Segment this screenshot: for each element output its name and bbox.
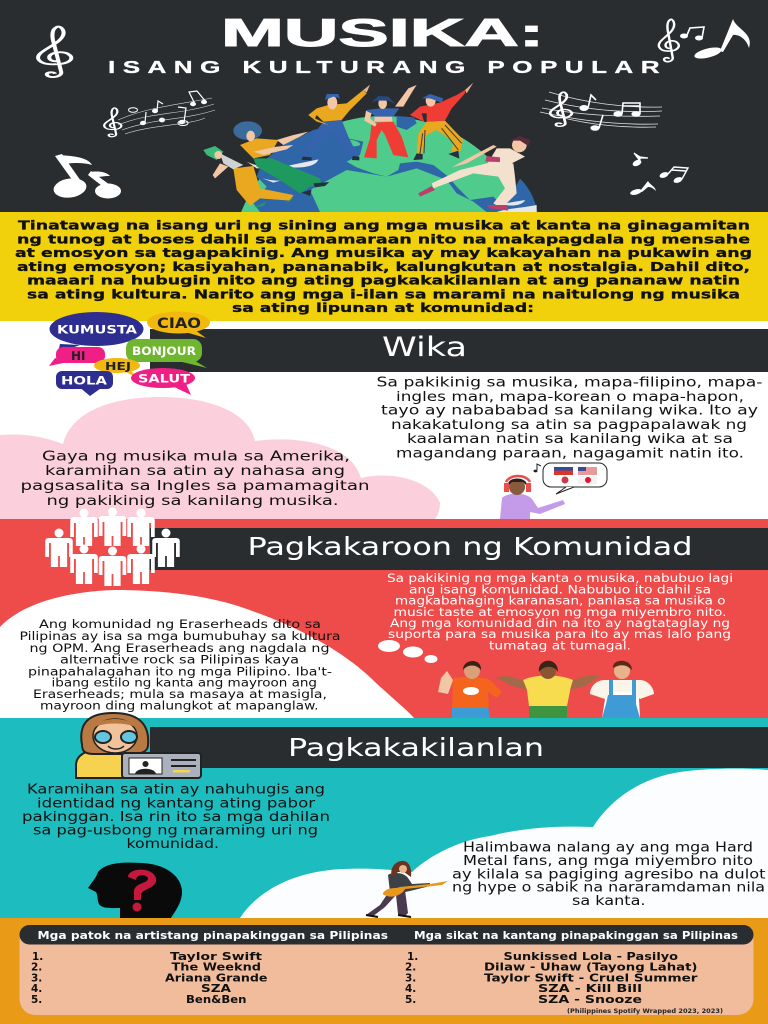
Komunidad paragraph: Sa pakikinig ng mga kanta o musika, nabubuo lagi	[387, 572, 733, 585]
list: top songs: Sunkissed Lola - Pasilyo	[504, 951, 678, 963]
Wika paragraph: tayo ay nabababad sa kanilang wika. Ito ay	[381, 404, 758, 418]
list: top songs: 5.	[405, 994, 416, 1006]
pink cloud text: pagsasalita sa Ingles sa pamamagitan	[20, 479, 370, 494]
panel: Pagkakakilanlan section background	[0, 718, 768, 918]
Pagkakakilanlan paragraph: identidad ng kantang ating pabor	[37, 796, 316, 812]
Eraserheads paragraph: Eraserheads; mula sa masaya at masigla,	[33, 688, 327, 701]
intro text: sa ating kultura. Narito ang mga i-ilan sa marami na naitulong ng musika	[27, 286, 740, 302]
icon: big beamed notes	[52, 154, 121, 200]
list: top songs: Dilaw - Uhaw (Tayong Lahat)	[484, 962, 698, 974]
dancer: blue trousers	[302, 85, 370, 160]
Eraserheads paragraph: Ang komunidad ng Eraserheads dito sa	[39, 618, 321, 631]
icon: group of people	[45, 508, 180, 586]
icon: small notes right	[630, 153, 688, 196]
cloud paragraph	[452, 840, 766, 909]
Wika paragraph: magandang paraan, nagagamit natin ito.	[396, 446, 744, 462]
Eraserheads paragraph: ng OPM. Ang Eraserheads ang nagdala ng	[30, 642, 330, 655]
friend: yellow shirt	[495, 661, 600, 718]
list: top songs: 2.	[405, 962, 416, 974]
list: top songs: 4.	[405, 983, 416, 995]
Eraserheads paragraph: ibang estilo ng kanta ang mayroon ang	[52, 676, 317, 690]
icon: person with ID card	[76, 713, 201, 778]
icon: greeting speech bubbles	[49, 312, 210, 396]
Komunidad paragraph: music taste at emosyon ng mga miyembro nito.	[394, 606, 726, 619]
Pagkakakilanlan paragraph: Karamihan sa atin ay nahuhugis ang	[27, 782, 325, 798]
Eraserheads paragraph: mayroon ding malungkot at mapanglaw.	[40, 700, 318, 712]
list: top artists: 3.	[31, 972, 42, 984]
source citation: (Philippines Spotify Wrapped 2023, 2023)	[567, 1008, 723, 1015]
list: top artists: Ariana Grande	[165, 972, 268, 984]
white thought cloud	[0, 590, 414, 718]
table header: songs: Mga sikat na kantang pinapakinggan sa Pilipinas	[414, 930, 738, 942]
table header: artists: Mga patok na artistang pinapakinggan sa Pilipinas	[38, 930, 388, 942]
list: top artists: 4.	[31, 983, 42, 995]
Wika paragraph: nakakatulong sa atin sa pagpapalawak ng	[391, 418, 747, 433]
Eraserheads paragraph	[20, 618, 340, 712]
list: top artists: The Weeknd	[172, 962, 261, 974]
icon: head with question mark	[88, 863, 182, 918]
cloud paragraph: ng hype o sabik na nararamdaman nila	[452, 880, 765, 896]
heading: Wika: Wika	[382, 332, 467, 363]
icon: treble clef left	[38, 27, 71, 77]
pink cloud	[0, 397, 440, 519]
Wika paragraph: ingles man, mapa-korean o mapa-hapon,	[396, 390, 744, 405]
Eraserheads paragraph: Pilipinas ay isa sa mga bumubuhay sa kultura	[20, 630, 340, 643]
list: top songs: 1.	[407, 951, 418, 963]
icon: staff right	[540, 92, 662, 131]
Wika paragraph: Sa pakikinig sa musika, mapa-filipino, mapa-	[376, 376, 763, 390]
list: top artists: Taylor Swift	[170, 951, 262, 963]
panel: bottom orange band	[0, 918, 768, 1024]
icon: greeting speech bubbles: KUMUSTA	[57, 322, 137, 336]
heading band: Wika	[150, 329, 768, 372]
intro text: ating emosyon; kasiyahan, pananabik, kalungkutan at nostalgia. Dahil dito,	[17, 259, 750, 274]
Komunidad paragraph: suporta para sa musika para ito ay mas lalo pang	[388, 628, 731, 641]
subtitle: ISANG KULTURANG POPULAR	[108, 57, 667, 77]
pink cloud text: ng pakikinig sa kanilang musika.	[46, 494, 338, 509]
illustration: globe with dancers	[203, 82, 538, 212]
list: top artists: 2.	[31, 962, 42, 974]
list: top songs	[405, 951, 699, 1006]
list: top songs: 3.	[405, 972, 416, 984]
heading: Pagkakaroon ng Komunidad: Pagkakaroon ng Komunidad	[248, 532, 692, 561]
dancer: green hair yellow trousers	[203, 146, 295, 207]
Pagkakakilanlan paragraph: sa pag-usbong ng maraming uri ng	[33, 824, 318, 838]
intro text: sa ating lipunan at komunidad:	[232, 300, 534, 315]
pink cloud text: Gaya ng musika mula sa Amerika,	[42, 450, 350, 464]
list: top songs: SZA - Snooze	[538, 994, 642, 1006]
table panel	[20, 925, 754, 1015]
pink cloud text	[20, 450, 370, 509]
illustration: three friends	[438, 661, 654, 718]
dancer: red top striped trousers	[410, 83, 473, 160]
heading: Pagkakakilanlan: Pagkakakilanlan	[288, 733, 544, 762]
intro text: at emosyon sa tagapakinig. Ang musika ay may kakayahan na pukawin ang	[15, 245, 752, 260]
list: top artists: 1.	[32, 951, 43, 963]
icon: greeting speech bubbles: CIAO	[157, 316, 201, 332]
panel: header background	[0, 0, 768, 212]
icon: treble clef and notes right	[659, 19, 750, 62]
icon: floating staff left	[104, 91, 215, 137]
icon: greeting speech bubbles: SALUT	[138, 372, 190, 386]
friend: blue overalls	[590, 661, 654, 718]
Eraserheads paragraph: pinapahalagahan ito ng mga Pilipino. Iba't-	[28, 666, 332, 678]
list: top songs: Taylor Swift - Cruel Summer	[484, 972, 699, 984]
list: top artists	[31, 951, 268, 1006]
thought bubbles	[378, 640, 438, 663]
pink cloud text: karamihan sa atin ay nahasa ang	[45, 464, 345, 479]
panel: Wika section background	[0, 321, 768, 519]
list: top artists: SZA	[201, 983, 232, 995]
Pagkakakilanlan paragraph	[22, 782, 330, 852]
Komunidad paragraph: magkabahaging karanasan, panlasa sa musika o	[395, 594, 726, 608]
white cloud right	[240, 769, 768, 918]
icon: greeting speech bubbles: BONJOUR	[132, 344, 196, 358]
cloud paragraph: Metal fans, ang mga miyembro nito	[463, 854, 753, 869]
icon: greeting speech bubbles: HEJ	[105, 360, 131, 373]
Komunidad paragraph	[387, 572, 733, 652]
dancer: afro green trousers	[233, 121, 329, 196]
dancer: red flared trousers	[364, 85, 417, 158]
intro text: ng tunog at boses dahil sa pamamaraan nito na makapagdala ng mensahe	[17, 232, 750, 246]
Komunidad paragraph: Ang mga komunidad din na ito ay nagtataglay ng	[390, 617, 730, 630]
friend: orange shirt	[438, 661, 502, 718]
intro text	[15, 218, 752, 315]
list: top artists: 5.	[31, 994, 42, 1006]
Pagkakakilanlan paragraph: komunidad.	[126, 837, 219, 852]
icon: greeting speech bubbles: HI	[71, 349, 86, 363]
Pagkakakilanlan paragraph: pakinggan. Isa rin ito sa mga dahilan	[22, 810, 330, 825]
panel: intro yellow band	[0, 212, 768, 321]
Wika paragraph: kaalaman natin sa kanilang wika at sa	[407, 432, 733, 447]
illustration: guitarist	[366, 861, 448, 917]
heading band: Pagkakakilanlan	[150, 727, 768, 768]
Komunidad paragraph: tumatag at tumagal.	[489, 640, 631, 652]
cloud paragraph: Halimbawa nalang ay ang mga Hard	[463, 840, 753, 856]
dancer: beige outfit	[418, 136, 530, 211]
heading band: Komunidad	[150, 528, 768, 570]
Eraserheads paragraph: alternative rock sa Pilipinas kaya	[60, 654, 299, 666]
list: top artists: Ben&Ben	[186, 994, 246, 1006]
title: MUSIKA:	[221, 12, 544, 55]
intro text: maaari na hubugin nito ang ating pagkakakilanlan at ang pananaw natin	[27, 272, 740, 288]
cloud paragraph: ay kilala sa pagiging agresibo na dulot	[452, 868, 766, 882]
panel: Komunidad section background	[0, 519, 768, 718]
list: top songs: SZA - Kill Bill	[538, 983, 642, 995]
cloud paragraph: sa kanta.	[572, 894, 646, 909]
globe	[241, 116, 538, 212]
icon: greeting speech bubbles: HOLA	[61, 374, 107, 388]
table header pill	[20, 925, 754, 944]
Komunidad paragraph: ang isang komunidad. Nabubuo ito dahil sa	[409, 584, 711, 596]
illustration: girl with headphones and flags	[500, 463, 607, 519]
Wika paragraph	[376, 376, 763, 462]
intro text: Tinatawag na isang uri ng sining ang mga musika at kanta na ginagamitan	[18, 218, 750, 232]
